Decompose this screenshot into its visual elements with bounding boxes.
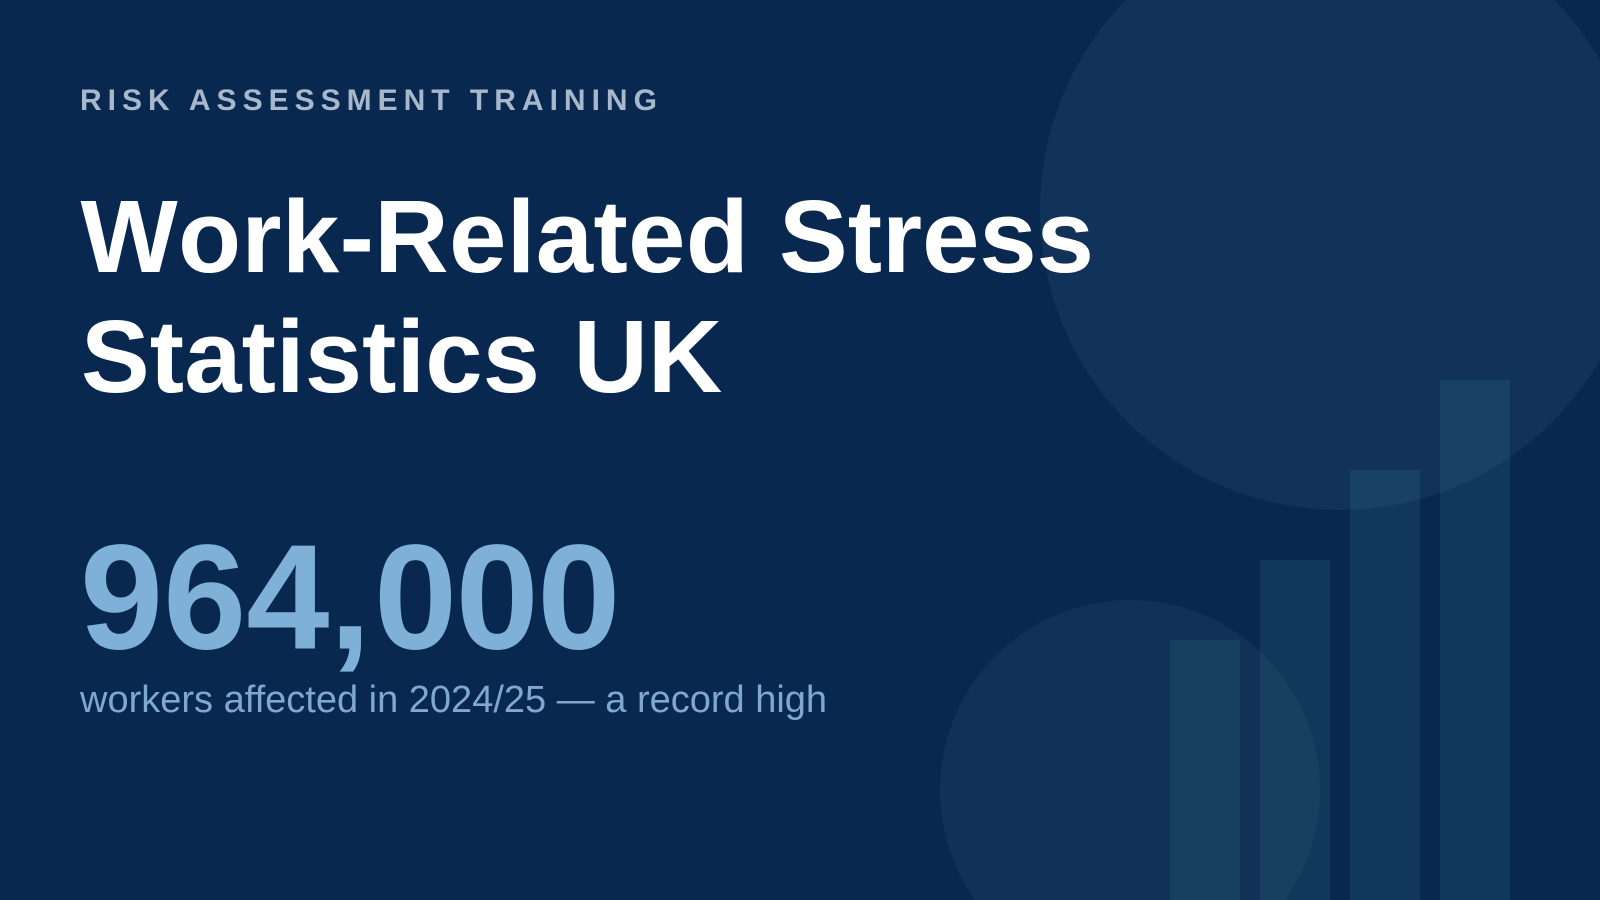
decorative bar chart — [1170, 380, 1510, 900]
eyebrow label: RISK ASSESSMENT TRAINING — [80, 84, 663, 117]
title — [80, 179, 1094, 414]
decorative circle: top right — [1040, 0, 1600, 510]
title: Stress — [779, 179, 1094, 294]
key statistic: 964,000 — [80, 514, 619, 680]
title: Statistics — [81, 299, 540, 414]
decorative circle: bottom — [940, 600, 1320, 900]
title: Work-Related — [80, 179, 749, 294]
statistic caption: workers affected in 2024/25 — a record high — [79, 679, 827, 721]
title: UK — [574, 299, 722, 414]
